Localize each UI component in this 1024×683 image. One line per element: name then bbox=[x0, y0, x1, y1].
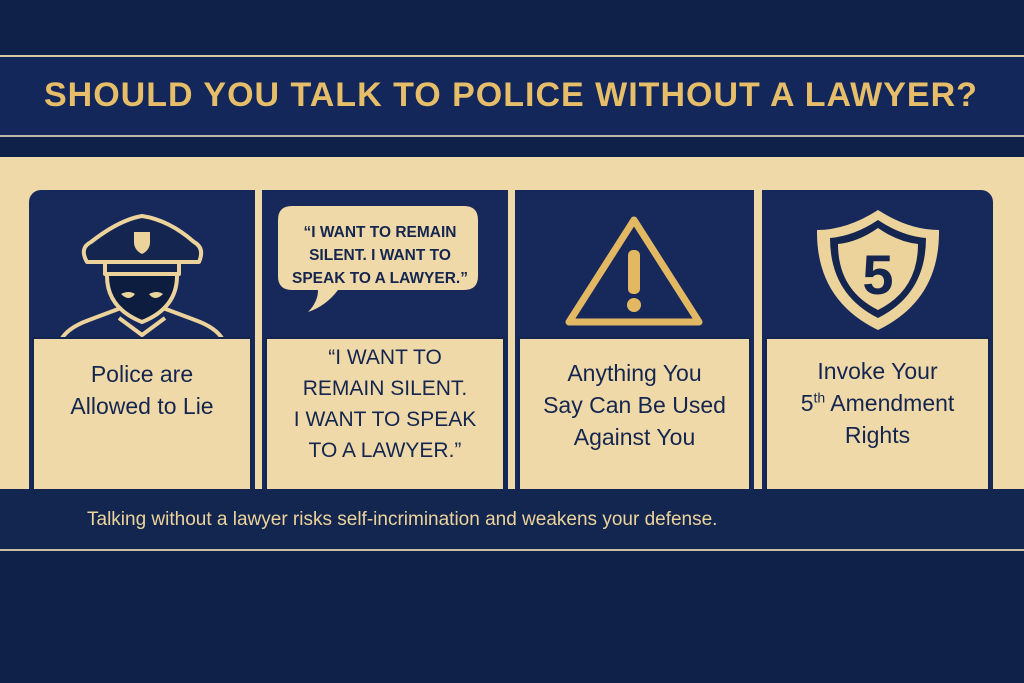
footer text: Talking without a lawyer risks self-incrimination and weakens your defense. bbox=[87, 509, 717, 530]
card 1: police lie bbox=[29, 190, 255, 490]
card 4: 5th amendment bbox=[762, 190, 993, 490]
speech bubble: “I WANT TO REMAIN bbox=[304, 224, 456, 241]
text: police are allowed to lie: Police are bbox=[91, 360, 193, 386]
text: quote: TO A LAWYER.” bbox=[309, 438, 461, 462]
text: Invoke Your bbox=[817, 358, 938, 384]
card 2: remain silent bbox=[262, 190, 508, 490]
title: SHOULD YOU TALK TO POLICE WITHOUT A LAWYER? bbox=[44, 76, 978, 114]
text: quote: “I WANT TO bbox=[328, 346, 442, 368]
text: Anything You bbox=[567, 360, 702, 386]
footer band bbox=[0, 489, 1024, 551]
icon: police officer bbox=[60, 214, 224, 337]
speech bubble: SILENT. I WANT TO bbox=[309, 247, 451, 264]
text: Say Can Be Used bbox=[543, 392, 726, 418]
text: quote: REMAIN SILENT. bbox=[303, 376, 467, 400]
text: police are allowed to lie: Allowed to Lie bbox=[70, 392, 214, 418]
icon: warning bbox=[566, 216, 702, 326]
text: Rights bbox=[845, 422, 910, 448]
text: Against You bbox=[574, 424, 695, 450]
card 3: used against you bbox=[515, 190, 754, 490]
text: 5th Amendment bbox=[801, 389, 954, 416]
beige panel bbox=[0, 157, 1024, 490]
text: police are allowed to lie bbox=[32, 337, 252, 490]
icon: shield 5 bbox=[817, 210, 939, 330]
icon: shield 5: 5 bbox=[862, 243, 894, 306]
title band bbox=[0, 55, 1024, 137]
text bbox=[518, 337, 751, 490]
text bbox=[765, 337, 990, 490]
speech bubble bbox=[278, 206, 478, 312]
text: quote bbox=[265, 337, 505, 490]
speech bubble: SPEAK TO A LAWYER.” bbox=[292, 270, 468, 287]
text: quote: I WANT TO SPEAK bbox=[294, 408, 476, 430]
